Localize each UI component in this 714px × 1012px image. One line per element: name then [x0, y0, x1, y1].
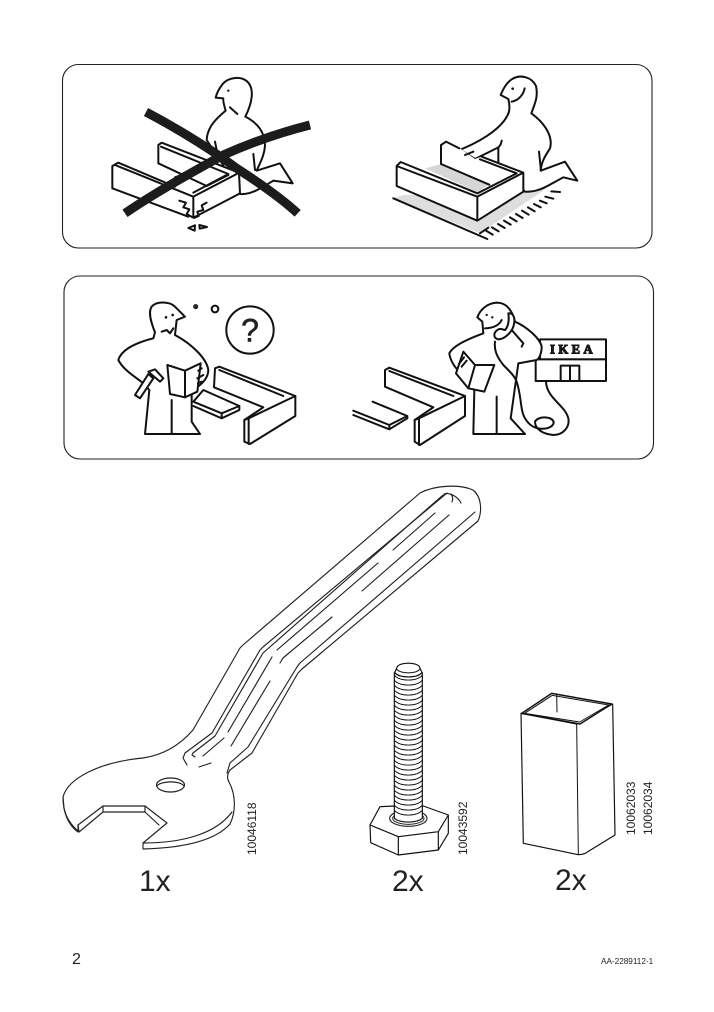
icon: question mark bubble	[226, 306, 274, 354]
icon: open manual	[167, 363, 203, 397]
rug with fringe	[393, 188, 560, 239]
panel: ask for help	[64, 276, 654, 459]
figure: happy person kneeling	[455, 77, 577, 192]
icon: hammer	[135, 369, 163, 398]
part: spanner wrench	[63, 486, 481, 849]
quantity: bolt: 2x	[392, 865, 424, 898]
furniture parts on floor	[193, 367, 295, 444]
figure: worried person kneeling	[207, 78, 293, 194]
quantity: tube: 2x	[555, 864, 587, 897]
part number: tube variant: 10062034	[641, 781, 655, 835]
icon: manual held open	[456, 352, 494, 392]
icon: telephone handset and cord	[494, 313, 569, 435]
illustration: wrong, assembling on hard floor damages the part	[112, 78, 310, 231]
document code: AA-2289112-1	[601, 957, 654, 966]
icon: question mark bubble: ?	[241, 313, 259, 349]
part numbers: tube: 10062033	[624, 781, 638, 835]
page number: 2	[72, 951, 81, 968]
part number: wrench: 10046118	[245, 802, 259, 855]
furniture parts on floor	[353, 368, 465, 445]
thought dots	[194, 305, 218, 312]
icon: IKEA store: IKEA	[550, 343, 594, 357]
illustration: confused person alone	[118, 303, 295, 444]
figure: person on telephone	[449, 303, 542, 434]
illustration: right, assembling on a rug	[393, 77, 577, 239]
icon: IKEA store	[536, 339, 606, 381]
part number: bolt: 10043592	[456, 801, 470, 855]
frame part on rug	[397, 142, 523, 221]
open frame part with cracked corner	[112, 143, 240, 218]
part: bolt with hex nut	[370, 663, 448, 855]
quantity: wrench: 1x	[139, 865, 171, 898]
figure: puzzled person with hammer	[118, 303, 208, 434]
panel: handling on floor	[62, 64, 652, 248]
illustration: person phones IKEA	[353, 303, 606, 445]
icon: large prohibition cross	[125, 112, 310, 213]
icon: broken fragments	[188, 225, 207, 231]
part: square tube	[521, 693, 615, 855]
